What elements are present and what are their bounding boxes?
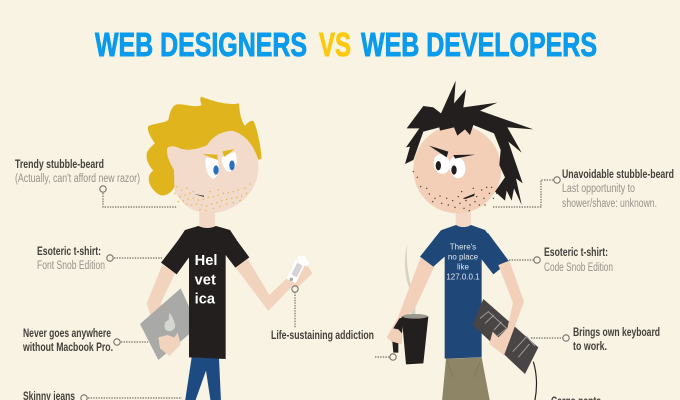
laptop: [140, 288, 198, 360]
callout: macbook pro: [22, 328, 148, 354]
t-shirt text: Helvetica: [195, 253, 217, 307]
callout: unavoidable stubble-beard: [493, 169, 674, 210]
developer left arm: [387, 257, 435, 344]
callout: brings own keyboard: to work.: [573, 341, 607, 353]
t-shirt text: There's no place like 127.0.0.1: [446, 242, 480, 281]
designer eyes: [205, 152, 237, 179]
t-shirt text: There's no place like 127.0.0.1: There's: [450, 242, 476, 251]
cargo pants: [442, 358, 490, 400]
callout: trendy stubble-beard: (Actually, can't afford new razor): [15, 173, 140, 185]
t-shirt text: Helvetica: ica: [195, 291, 216, 307]
designer hand: [158, 333, 181, 356]
callout: esoteric t-shirt, font snob: Font Snob Edition: [37, 260, 105, 272]
developer collar: [433, 225, 493, 240]
steam: [405, 244, 415, 315]
keyboard: [473, 299, 538, 374]
callout: life-sustaining addiction: Life-sustaining addiction: [271, 330, 374, 342]
developer t-shirt: [420, 226, 509, 359]
developer face: [413, 125, 501, 213]
developer eyebrows: [429, 146, 475, 159]
t-shirt text: There's no place like 127.0.0.1: 127.0.0.1: [446, 272, 480, 281]
developer eyes: [432, 153, 467, 180]
callout: skinny jeans: [23, 391, 182, 400]
coffee mug: [392, 314, 428, 364]
developer head: [405, 81, 533, 240]
designer hair: [147, 97, 262, 195]
callout: esoteric t-shirt, font snob: Esoteric t-shirt:: [37, 246, 101, 258]
web designer figure: [140, 97, 312, 400]
designer eyebrows: [202, 149, 235, 160]
designer jeans: [185, 357, 221, 400]
designer face: [167, 128, 258, 213]
title: [95, 26, 597, 63]
callout: esoteric t-shirt, code snob: Esoteric t-shirt:: [544, 247, 608, 259]
developer hair: [405, 81, 533, 205]
title: WEB DESIGNERS: [95, 26, 307, 63]
designer right arm: [235, 257, 293, 311]
t-shirt text: There's no place like 127.0.0.1: like: [457, 262, 470, 271]
title: VS: [319, 26, 351, 63]
designer head: [147, 97, 262, 240]
callout: macbook pro: without Macbook Pro.: [22, 342, 113, 354]
developer upper arm: [498, 261, 524, 304]
t-shirt text: Helvetica: Hel: [195, 253, 217, 269]
callout: esoteric t-shirt, code snob: Code Snob Edition: [544, 262, 613, 274]
designer t-shirt: [161, 226, 249, 359]
callout: esoteric t-shirt, code snob: [509, 247, 613, 274]
callout: brings own keyboard: [531, 327, 660, 353]
title: WEB DEVELOPERS: [361, 26, 597, 63]
designer body: [140, 226, 312, 400]
web developer figure: [387, 81, 538, 400]
callout: unavoidable stubble-beard: Last opportunity to: [562, 183, 635, 195]
developer mouth: [463, 193, 475, 199]
designer collar: [178, 226, 237, 240]
callout: life-sustaining addiction: [271, 286, 396, 360]
keyboard cable: [533, 362, 537, 400]
designer left arm: [147, 265, 175, 340]
developer neck: [456, 207, 471, 230]
callout: trendy stubble-beard: Trendy stubble-beard: [15, 159, 104, 171]
developer body: [387, 226, 538, 400]
t-shirt text: Helvetica: vet: [195, 272, 216, 288]
developer stubble: [413, 171, 497, 211]
callout: esoteric t-shirt, font snob: [37, 246, 162, 272]
callout: trendy stubble-beard: [15, 159, 177, 207]
designer stubble: [174, 183, 251, 211]
designer neck: [199, 207, 215, 231]
designer mouth: [194, 194, 204, 197]
callout: macbook pro: Never goes anywhere: [23, 328, 111, 340]
developer hand and forearm: [489, 302, 524, 355]
t-shirt text: There's no place like 127.0.0.1: no place: [448, 252, 479, 261]
phone: [287, 255, 312, 288]
